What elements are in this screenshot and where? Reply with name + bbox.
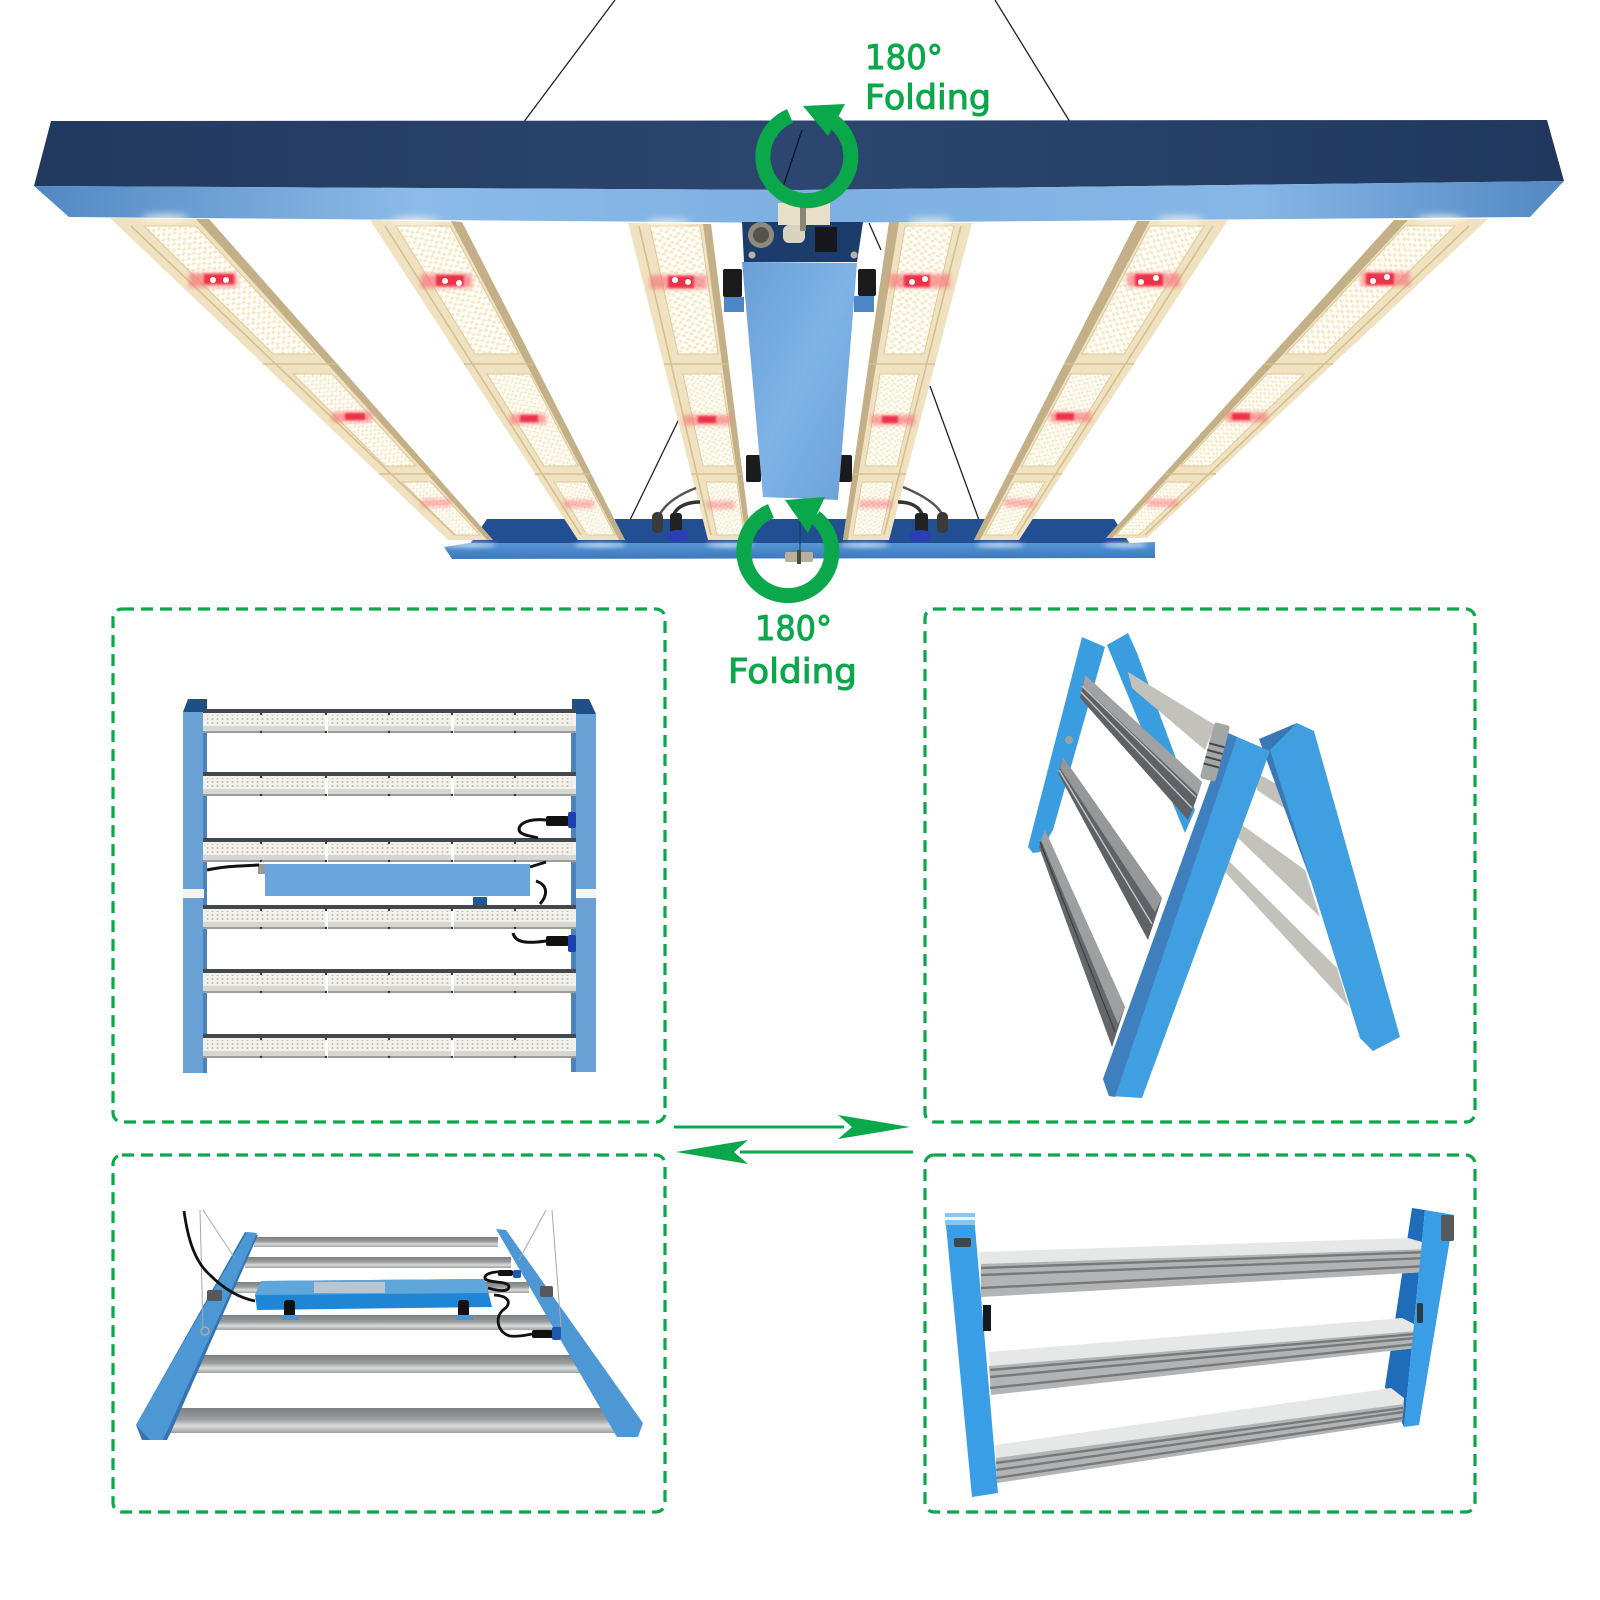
rail 1: [979, 1238, 1429, 1297]
LED bar 4: [843, 222, 972, 540]
LED bar 2: [370, 220, 625, 540]
top label: [865, 38, 991, 118]
right frame column: [571, 699, 596, 1072]
front left leg: [1103, 733, 1270, 1098]
front rail 1: [1080, 675, 1202, 820]
aluminium rails: [165, 1237, 615, 1433]
driver box: [742, 262, 857, 500]
left frame column: [183, 699, 207, 1073]
panel: folded side view: [925, 1155, 1475, 1512]
driver module: [255, 1279, 492, 1320]
hinge latch: [1200, 722, 1230, 782]
top cross bar: [34, 120, 1564, 223]
rail 2: [989, 1318, 1416, 1395]
driver connector plate: [742, 203, 863, 262]
front right leg: [1259, 723, 1400, 1051]
connectors: [546, 812, 576, 952]
right frame: [496, 1229, 643, 1437]
top label: 180°: [865, 38, 943, 78]
rail 3: [995, 1388, 1404, 1483]
bar glow points: [141, 215, 1464, 226]
panel: hanging view from above: [113, 1155, 665, 1512]
hanging wires: [523, 0, 1070, 520]
bottom rotation ring: [744, 497, 832, 596]
panel: flat front view: [113, 609, 665, 1122]
lower cross bar: [444, 519, 1155, 564]
right post dark: [1385, 1208, 1425, 1427]
bottom label: Folding: [728, 652, 857, 692]
arrow: fold direction left: [676, 1140, 913, 1164]
arrow: fold direction right: [674, 1115, 910, 1139]
driver module: [258, 864, 530, 905]
bottom label: [728, 609, 857, 692]
back rails: [1128, 672, 1349, 1007]
driver clips: [723, 269, 876, 482]
top label: Folding: [865, 78, 991, 118]
bottom label: 180°: [755, 609, 832, 649]
LED rows: [203, 709, 576, 1058]
panel: A-frame folded view: [925, 609, 1475, 1122]
left frame: [136, 1232, 258, 1440]
cables: [207, 820, 546, 942]
black cables: [184, 1211, 532, 1336]
LED bar 6: [1106, 219, 1488, 538]
LED bar 5: [974, 220, 1228, 540]
hanging wires: [200, 1210, 561, 1330]
LED bar 1: [110, 218, 493, 540]
right post light: [1404, 1210, 1454, 1427]
front rail 3: [1039, 830, 1125, 1047]
front rail 2: [1058, 757, 1162, 940]
LED bar 3: [628, 223, 751, 540]
top rotation ring: [763, 104, 851, 201]
left post: [945, 1213, 998, 1497]
power cables at lower bar: [652, 487, 948, 542]
back legs: [1028, 633, 1195, 853]
connectors: [498, 1270, 561, 1340]
